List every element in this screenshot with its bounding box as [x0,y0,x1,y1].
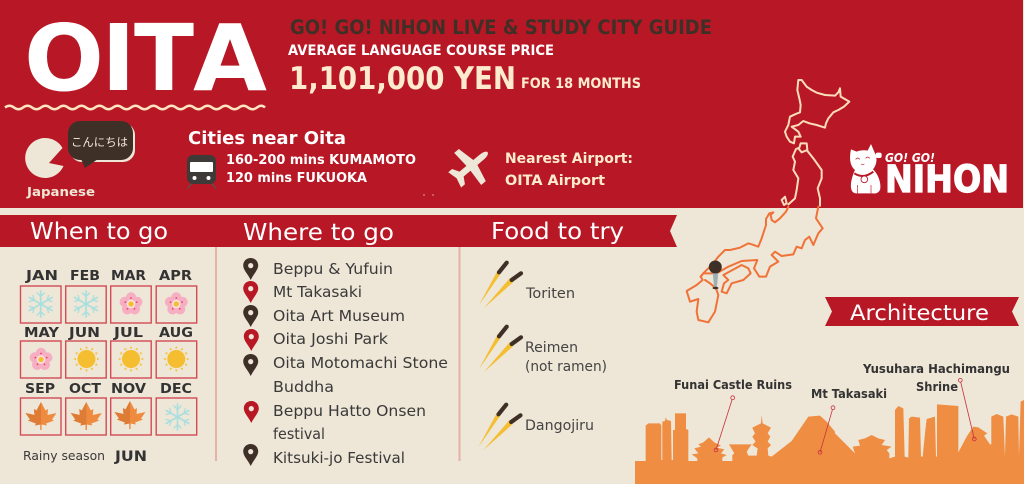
month labels: OCT [69,381,102,397]
price figure: 1,101,000 YEN [289,61,516,97]
heading: where to go: Where to go [243,220,394,246]
skyline illustration [635,400,1024,484]
place names: Buddha [273,378,334,396]
label: Funai Castle Ruins [674,377,792,452]
label: Funai Castle Ruins: Funai Castle Ruins [674,377,792,392]
label: Mt Takasaki: Mt Takasaki [811,386,887,401]
place names: Kitsuki-jo Festival [273,449,405,467]
logo: Go! Go! Nihon: GO! GO! [885,151,935,165]
title: OITA [24,5,267,112]
text: nearest airport: Nearest Airport: [505,151,633,167]
month labels [24,268,193,397]
dish names: Reimen [525,340,578,356]
label: Yusuhara Hachimangu Shrine: Yusuhara Hachimangu [862,361,1010,376]
title: OITA: O [24,5,104,112]
month labels: SEP [25,381,55,397]
icon: plane [441,136,501,196]
month labels: MAR [111,268,147,284]
title: OITA: A [193,5,267,112]
dish names: Dangojiru [525,418,594,434]
text: rainy season: Rainy season [23,448,105,463]
heading: food to try: Food to try [491,219,624,245]
panel: when to go calendar [20,268,197,435]
icon: language speaker with speech bubble [25,121,135,178]
label: Yusuhara Hachimangu Shrine [862,361,1010,441]
heading: cities near Oita: Cities near Oita [188,129,346,149]
place names: Oita Motomachi Stone [273,354,448,372]
season icons [26,291,189,430]
dish names: Toriten [525,286,575,302]
text: nearby city travel times: 160-200 mins KUMAMOTO [226,152,416,168]
label: Yusuhara Hachimangu Shrine: Shrine [916,379,958,394]
text: average course price label: AVERAGE LANGUAGE COURSE PRICE [288,43,554,59]
month labels: JUN [68,325,100,341]
price duration: FOR 18 MONTHS [521,76,641,92]
header panel [0,0,1023,208]
month labels: APR [159,268,193,284]
month labels: JAN [25,268,58,284]
panel: where to go list [243,258,448,467]
title: OITA: I [102,5,136,112]
place names: festival [273,425,325,443]
icons: chopsticks [478,263,521,450]
dish names: (not ramen) [525,359,607,375]
heading: when to go: When to go [30,219,168,245]
place names [273,260,448,467]
logo: Go! Go! Nihon: NIHON [885,158,1009,201]
location pins [243,258,259,466]
month labels: NOV [111,381,147,397]
month labels: MAY [24,325,59,341]
heading: city guide: GO! GO! NIHON LIVE & STUDY CITY GUIDE [290,16,712,39]
title: OITA: T [134,5,194,112]
map pin: Oita location [709,260,722,289]
icon: train [187,155,216,188]
month labels: FEB [70,268,100,284]
banner: architecture [825,297,1019,326]
label: Mt Takasaki [811,386,887,454]
logo: Go! Go! Nihon [850,144,1009,201]
icon: language speaker with speech bubble: こんにちは [71,134,128,150]
text: rainy season [23,448,147,465]
banner: when, where, food [0,215,677,247]
month labels: JUL [113,325,143,341]
wavy divider [5,106,265,109]
dish names [525,286,607,434]
place names: Oita Joshi Park [273,330,388,348]
month cells [20,286,197,435]
panel: food to try list [478,263,607,450]
month labels: AUG [159,325,193,341]
place names: Beppu & Yufuin [273,260,393,278]
icon: lucky cat [850,144,882,193]
text: nearest airport: OITA Airport [505,173,605,189]
map: Japan outline [687,80,849,322]
text: nearest airport [505,151,633,189]
text: nearby city travel times: 120 mins FUKUOKA [226,170,368,186]
place names: Beppu Hatto Onsen [273,402,426,420]
text: rainy season: JUN [114,449,147,465]
place names: Mt Takasaki [273,283,362,301]
text: Japanese label: Japanese [26,185,95,199]
place names: Oita Art Museum [273,307,405,325]
text: nearby city travel times [226,152,416,186]
heading: architecture: Architecture [850,301,989,325]
month labels: DEC [160,381,192,397]
